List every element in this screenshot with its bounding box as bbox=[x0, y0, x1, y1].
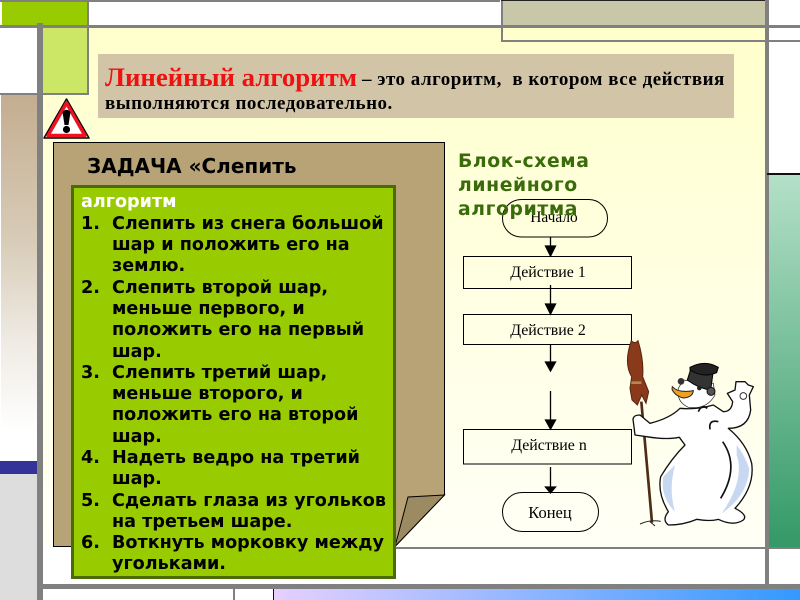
illustration: snowman with broom bbox=[626, 340, 754, 526]
step 2: 2. bbox=[81, 278, 100, 298]
flowchart action 1: Действие 1 bbox=[510, 264, 586, 281]
panel: algorithm steps bbox=[71, 185, 396, 579]
coal eyes and side button bbox=[678, 378, 715, 395]
definition second line: выполняются последовательно. bbox=[105, 93, 393, 114]
pale green block bbox=[43, 28, 87, 93]
flowchart heading bbox=[458, 151, 590, 220]
arrow: start to action 1 bbox=[546, 237, 556, 256]
flowchart action n bbox=[464, 430, 632, 464]
broom head bbox=[627, 341, 649, 405]
flowchart action 2 bbox=[464, 314, 632, 344]
step 3: меньше второго, и bbox=[112, 384, 303, 404]
step 6: угольками. bbox=[112, 554, 226, 574]
background: cream slide area bbox=[43, 28, 765, 547]
head bbox=[678, 380, 715, 408]
step 2: положить его на первый bbox=[112, 320, 364, 340]
flowchart heading: Блок-схема bbox=[458, 151, 590, 172]
step 5: Сделать глаза из угольков bbox=[112, 491, 386, 511]
body contour and buttons bbox=[698, 407, 731, 498]
flowchart action 2: Действие 2 bbox=[510, 322, 586, 339]
left blue bar bbox=[0, 461, 37, 474]
step 4: Надеть ведро на третий bbox=[112, 448, 360, 468]
flowchart end: Конец bbox=[528, 503, 572, 522]
flowchart end bbox=[502, 492, 598, 532]
definition term: Линейный алгоритм bbox=[105, 62, 357, 92]
arrow: action n to end bbox=[546, 467, 556, 493]
right green gradient panel bbox=[769, 175, 800, 548]
snowman body bbox=[633, 382, 753, 525]
flowchart bbox=[463, 199, 632, 532]
broom stick bbox=[640, 402, 661, 526]
step 1: Слепить из снега большой bbox=[112, 214, 384, 234]
flowchart heading: алгоритма bbox=[458, 199, 578, 220]
flowchart action 1 bbox=[464, 256, 632, 288]
step 3: 3. bbox=[81, 363, 100, 383]
step 3: шар. bbox=[112, 427, 162, 447]
step 5: на третьем шаре. bbox=[112, 512, 292, 532]
step 1: землю. bbox=[112, 256, 185, 276]
step 6 bbox=[81, 533, 384, 574]
raised hand ring bbox=[740, 393, 747, 399]
top-right khaki block bbox=[502, 1, 765, 25]
top hat bbox=[687, 369, 713, 390]
definition first line: – это алгоритм, в котором все действия bbox=[362, 69, 725, 90]
step 2: Слепить второй шар, bbox=[112, 278, 328, 298]
step 2: меньше первого, и bbox=[112, 299, 305, 319]
arrow: action 1 to action 2 bbox=[546, 285, 556, 314]
step 3 bbox=[81, 363, 358, 447]
step 1: 1. bbox=[81, 214, 100, 234]
top-left green block bbox=[2, 2, 88, 25]
left grey block bbox=[0, 474, 37, 600]
body shading bbox=[663, 445, 749, 513]
step 4 bbox=[81, 448, 360, 489]
step 3: Слепить третий шар, bbox=[112, 363, 327, 383]
flowchart heading: линейного bbox=[458, 175, 578, 196]
step 2 bbox=[81, 278, 364, 362]
carrot nose bbox=[672, 387, 693, 398]
step 1 bbox=[81, 214, 384, 276]
task heading: ЗАДАЧА «Слепить bbox=[87, 154, 296, 178]
left tan column bbox=[1, 95, 37, 460]
step 6: 6. bbox=[81, 533, 100, 553]
definition box bbox=[98, 54, 734, 118]
arrow: action 2 down bbox=[546, 344, 556, 371]
arrow: into action n bbox=[546, 391, 556, 429]
step 5 bbox=[81, 491, 386, 532]
step 2: шар. bbox=[112, 342, 162, 362]
step 1: шар и положить его на bbox=[112, 235, 350, 255]
step 4: 4. bbox=[81, 448, 100, 468]
step 3: положить его на второй bbox=[112, 405, 358, 425]
step 5: 5. bbox=[81, 491, 100, 511]
panel: task note with curled corner bbox=[53, 142, 446, 547]
icon: warning triangle bbox=[43, 98, 90, 139]
steps heading: алгоритм bbox=[81, 192, 177, 212]
flowchart action n: Действие n bbox=[511, 437, 587, 454]
bottom blue gradient band bbox=[273, 589, 800, 600]
step 6: Воткнуть морковку между bbox=[112, 533, 384, 553]
step 4: шар. bbox=[112, 469, 162, 489]
flowchart start bbox=[502, 200, 608, 237]
flowchart start: Начало bbox=[530, 209, 578, 226]
